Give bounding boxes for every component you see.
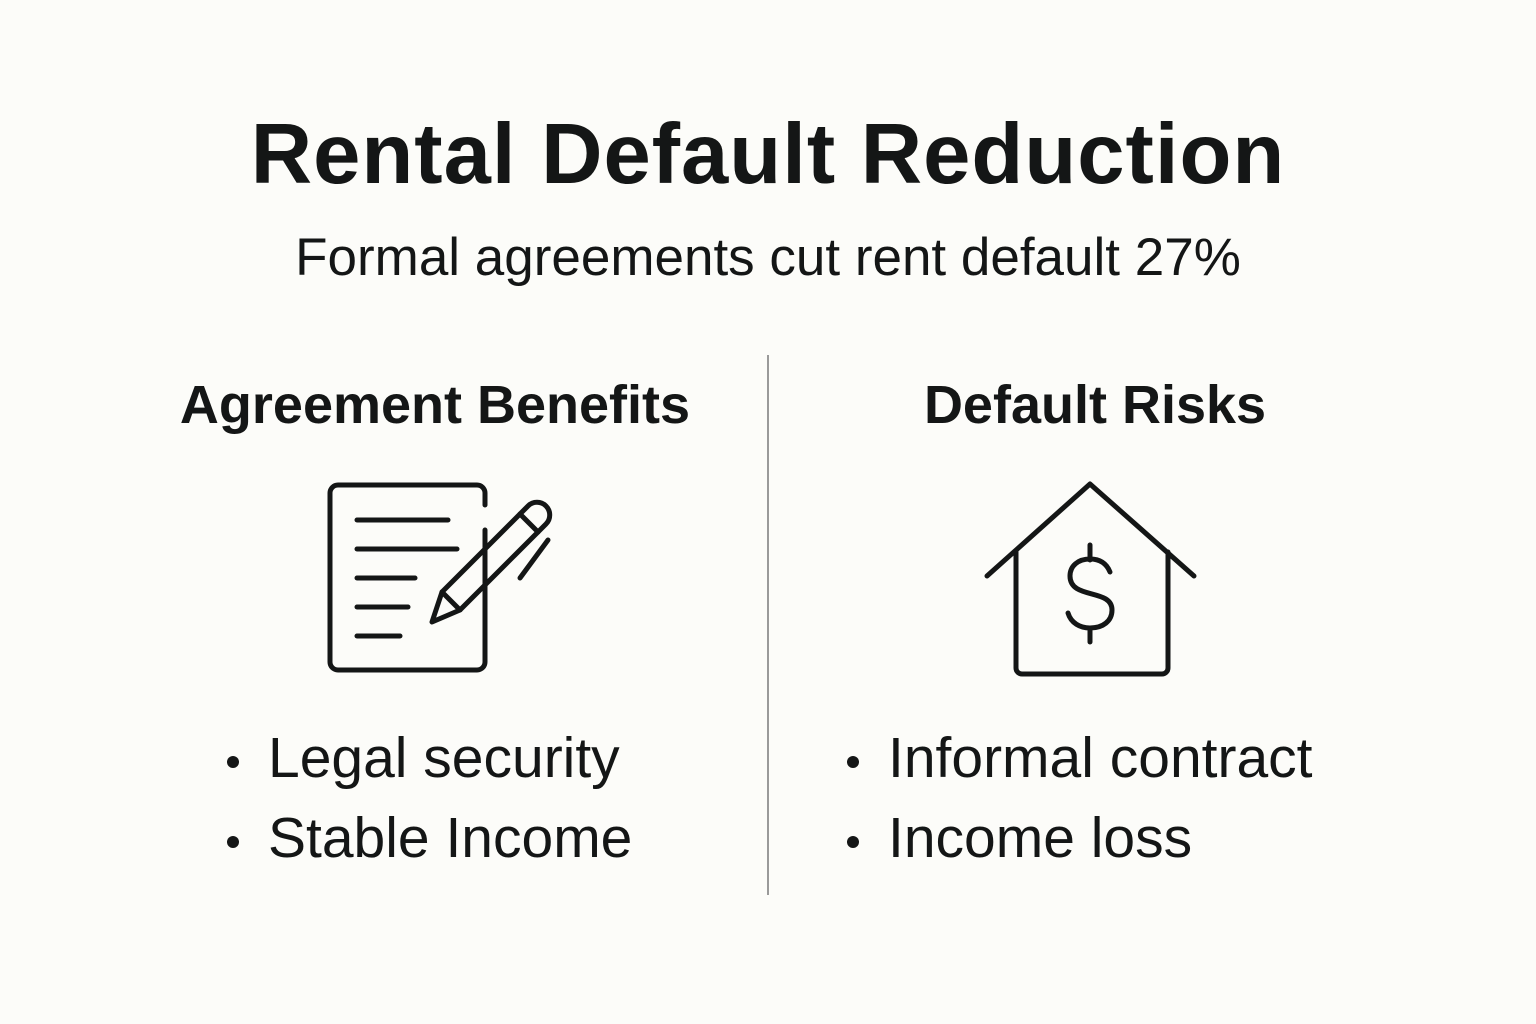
bullet list: benefits: Stable Income: [268, 806, 632, 870]
heading: Agreement Benefits: Agreement Benefits: [180, 375, 690, 435]
bullet list: risks: [847, 726, 1312, 870]
divider: [767, 355, 769, 895]
panel: agreement benefits: [180, 375, 690, 870]
heading: Default Risks: Default Risks: [924, 375, 1266, 435]
bullet list: benefits: [227, 726, 632, 870]
bullet list: risks: Informal contract: [888, 726, 1312, 790]
icon: house with dollar: [984, 481, 1196, 676]
subtitle: Formal agreements cut rent default 27%: [295, 228, 1241, 287]
bullet list: benefits: Legal security: [268, 726, 620, 790]
bullet list: risks: Income loss: [888, 806, 1192, 870]
title: Rental Default Reduction: [251, 107, 1285, 202]
panel: default risks: [847, 375, 1312, 870]
icon: document with pen: [328, 482, 552, 672]
